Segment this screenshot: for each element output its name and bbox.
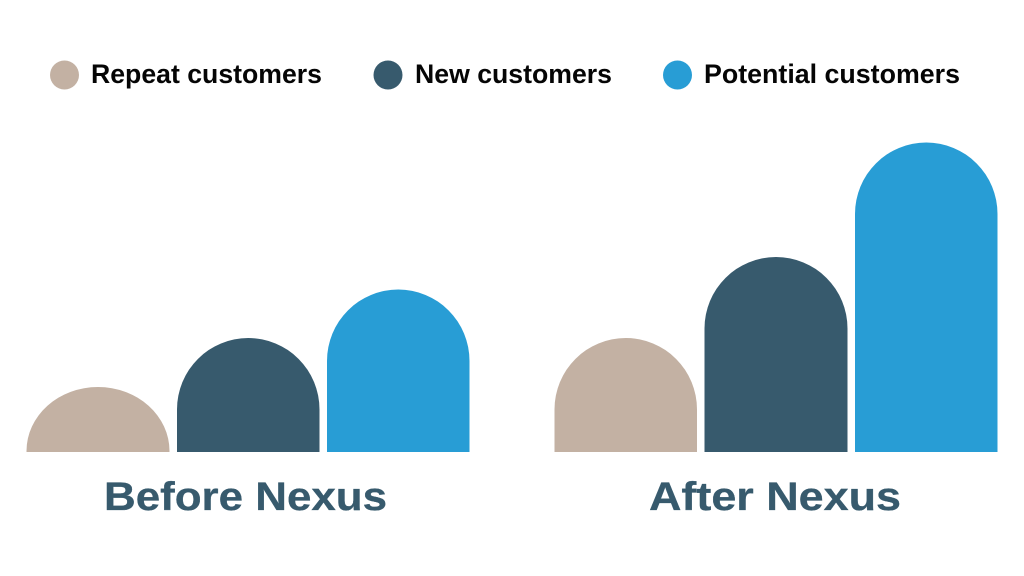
chart: before Nexus bbox=[26, 290, 470, 452]
legend bbox=[50, 59, 960, 90]
legend item: repeat customers: Repeat customers bbox=[91, 59, 322, 89]
heading: after Nexus: After Nexus bbox=[649, 475, 901, 519]
legend item: potential customers: Potential customers bbox=[704, 59, 960, 89]
bar: before repeat customers bbox=[26, 387, 170, 452]
chart: after Nexus bbox=[554, 142, 998, 452]
bar: before new customers bbox=[177, 338, 320, 452]
bar: after repeat customers bbox=[554, 338, 697, 452]
bar: after new customers bbox=[704, 257, 848, 452]
bar: before potential customers bbox=[327, 290, 470, 452]
bar: after potential customers bbox=[855, 142, 998, 452]
legend item: new customers: New customers bbox=[415, 59, 612, 89]
heading: before Nexus: Before Nexus bbox=[104, 475, 387, 519]
